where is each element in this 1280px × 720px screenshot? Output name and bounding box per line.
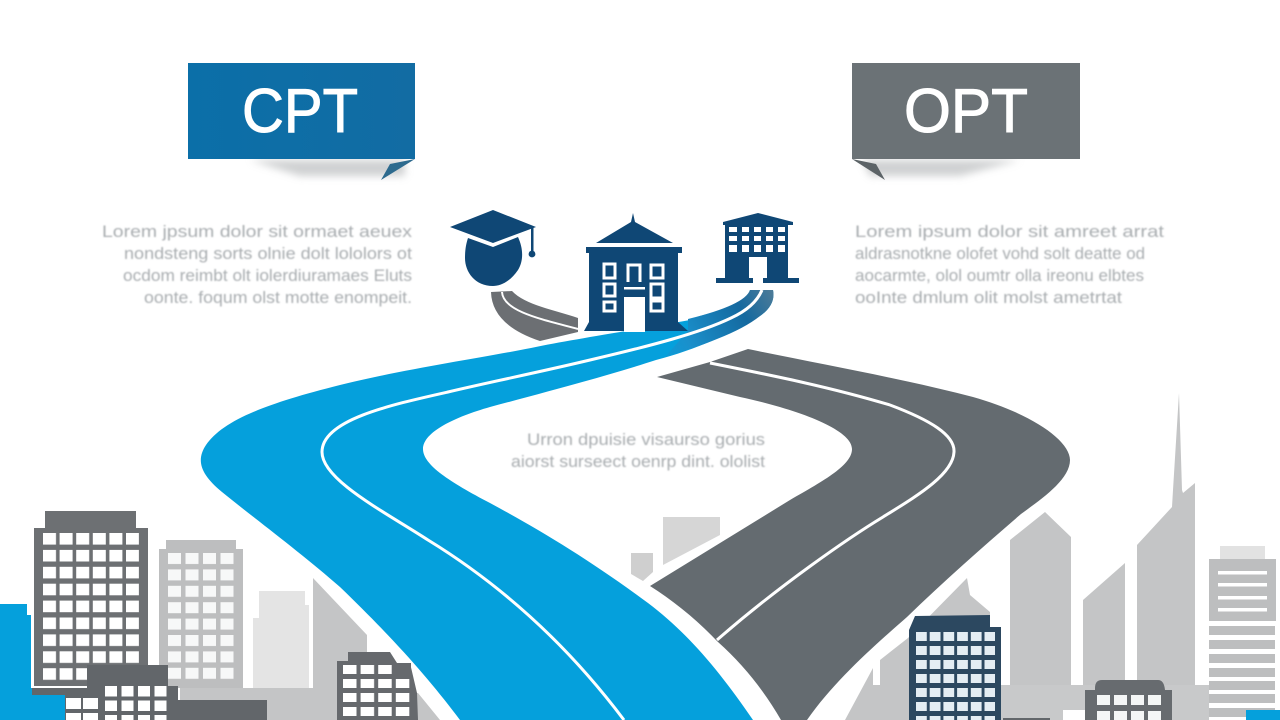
right paragraph: aocarmte, olol oumtr olla ireonu elbtes <box>855 267 1144 285</box>
centre background buildings <box>631 517 720 581</box>
CPT banner <box>188 63 415 180</box>
right paragraph: ooInte dmlum olit molst ametrtat <box>855 289 1122 307</box>
ground strip <box>1000 685 1210 720</box>
small pale block <box>631 553 653 581</box>
grey OPT road <box>650 349 1070 720</box>
right paragraph <box>855 223 1164 307</box>
short angled tower <box>1083 563 1125 690</box>
left paragraph: ocdom reimbt olt iolerdiuramaes Eluts <box>123 267 412 285</box>
banner box <box>188 63 415 159</box>
banner label: OPT <box>904 77 1028 146</box>
pale block behind grey road <box>663 517 720 565</box>
centre caption: aiorst surseect oenrp dint. ololist <box>511 453 765 471</box>
windows <box>604 264 663 311</box>
right paragraph: Lorem ipsum dolor sit amreet arrat <box>855 223 1164 241</box>
blue CPT road <box>201 290 773 720</box>
pale background building <box>253 591 309 688</box>
left skyline <box>0 511 440 720</box>
icon: office building <box>716 213 799 283</box>
grey angled background building <box>180 578 440 720</box>
centre caption: Urron dpuisie visaurso gorius <box>527 431 765 449</box>
centre caption <box>511 431 765 471</box>
small dark rounded building <box>1085 680 1172 720</box>
blue road surface <box>201 290 773 720</box>
pointed mid-ground tower behind navy block <box>845 578 990 720</box>
windows <box>729 227 785 282</box>
left paragraph: nondsteng sorts olnie dolt lololors ot <box>124 245 412 263</box>
tall angled tower <box>1000 512 1078 720</box>
upper darker road band <box>665 290 773 357</box>
white centre line <box>710 363 954 640</box>
banner label: CPT <box>242 77 358 146</box>
small dark building <box>337 652 418 720</box>
small pale base block <box>1063 710 1085 720</box>
spire tower <box>1137 393 1195 690</box>
left paragraph: Lorem jpsum dolor sit ormaet aeuex <box>102 223 413 241</box>
blue block at left edge <box>0 604 66 720</box>
left paragraph: oonte. foqum olst motte enompeit. <box>144 289 412 307</box>
white centre line <box>322 290 762 720</box>
icon: main college building <box>584 213 688 332</box>
banner box <box>852 63 1080 159</box>
OPT banner <box>852 63 1080 180</box>
navy office tower <box>909 615 1001 720</box>
door <box>624 297 645 332</box>
right paragraph: aldrasnotkne olofet vohd solt deatte od <box>855 245 1145 263</box>
icon: grey road piece <box>491 291 578 341</box>
banner shadow <box>862 160 1020 176</box>
dark lower building <box>32 665 267 720</box>
dark base strip <box>1003 718 1050 720</box>
grey road surface <box>650 349 1070 720</box>
banner tail <box>852 159 885 180</box>
striped building <box>1209 546 1276 720</box>
light grey office tower <box>159 540 243 688</box>
banner tail <box>381 159 415 180</box>
dark grey office tower <box>34 511 148 686</box>
banner shadow <box>250 160 405 176</box>
blue corner block <box>1246 710 1280 720</box>
icon: graduation cap <box>450 210 536 286</box>
right skyline <box>845 393 1280 720</box>
left paragraph <box>102 223 413 307</box>
